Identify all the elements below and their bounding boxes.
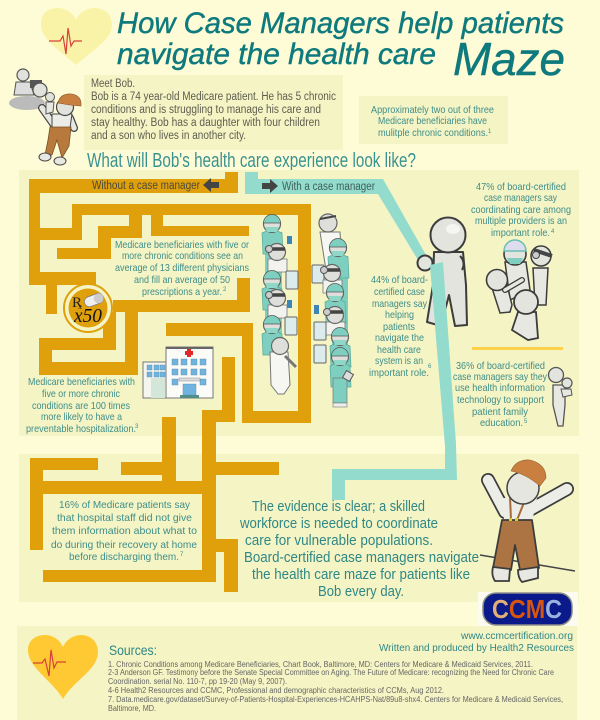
text: physicians and prescriptions [115,239,249,298]
panel: two out of three: mulitple chronic conditions. [378,127,488,139]
text: source list: Coordination. serial No. 110-7, pp 19-20 (May 9, 2007). [108,677,287,686]
panel: meet Bob: and a son who lives in another city. [91,130,246,142]
text: source list: 1. Chronic Conditions among Medicare Beneficiaries, Chart Book, Baltimore, MD: Centers for Medicare & Medicaid Services, 2011. [108,660,533,669]
text: health information technology: 36% of board-certified [456,360,545,372]
text: the evidence is clear: the health care maze for patients like [252,567,470,583]
illustration: doctors column right [312,214,353,407]
panel: two out of three: Approximately two out of three [371,104,494,116]
text: navigate the health care system: managers say [372,298,428,310]
text: the evidence is clear: The evidence is clear; a skilled [252,499,425,515]
divider [472,347,563,350]
text: coordinating care: case managers say [484,192,558,204]
text: source list [108,660,563,713]
text: navigate the health care system: system is an [375,355,423,367]
illustration: doctors column left [262,214,298,394]
text: navigate the health care system: navigate the [375,332,424,344]
panel: maze lower [19,454,579,602]
panel: meet Bob: Meet Bob. [91,78,135,90]
label: with a case manager: With a case manager [282,181,375,193]
text: navigate the health care system: certified case [374,286,425,298]
icon: Rx x50 prescription: x50 [73,305,102,327]
icon: Rx x50 prescription [64,284,112,332]
text: hospital discharge information: before discharging them. [69,551,179,563]
text: source list: 4-6 Health2 Resources and CCMC, Professional and demographic characteristics of CCMs, Aug 2012. [108,686,444,695]
text: website and credit: www.ccmcertification.org [460,630,573,642]
text: health information technology: patient family [472,406,529,418]
text: website and credit [379,630,574,654]
icon: pale heart with heartbeat [41,8,112,65]
text: preventable hospitalization: Medicare beneficiaries with [28,376,135,388]
panel: maze main [19,170,579,436]
text: navigate the health care system [369,274,432,379]
text: preventable hospitalization: conditions are 100 times [32,400,130,412]
text: coordinating care: coordinating care among [471,204,571,216]
text: physicians and prescriptions: average of 13 different physicians [115,262,249,274]
text: physicians and prescriptions: and fill an average of 50 [134,274,230,286]
panel: sources [17,626,577,720]
text: preventable hospitalization: preventable hospitalization. [26,423,136,435]
text: navigate the health care system: helping [385,309,414,321]
text: physicians and prescriptions: Medicare beneficiaries with five or [115,239,249,251]
text: physicians and prescriptions: 2 [223,287,227,293]
text: health information technology: 5 [524,419,528,425]
text: website and credit: Written and produced by Health2 Resources [379,642,574,654]
text: the evidence is clear [239,499,479,600]
text: health information technology [453,360,548,429]
maze without a case manager [29,172,311,592]
text: source list: Baltimore, MD. [108,704,156,713]
title: navigate the health care [117,38,436,71]
text: the evidence is clear: workforce is needed to coordinate [239,516,438,532]
panel: meet Bob: conditions and is struggling to manage his care and [91,104,321,116]
text: navigate the health care system: important role. [369,367,429,379]
panel: meet Bob: Bob is a 74 year-old Medicare patient. He has 5 chronic [91,91,336,103]
text: hospital discharge information: 7 [180,552,184,558]
label: with a case manager [262,179,375,193]
text: preventable hospitalization: 3 [135,424,139,430]
illustration: Bob and family [9,69,81,165]
text: navigate the health care system: 6 [428,364,432,370]
maze path with a case manager [245,172,457,500]
logo: CCMC [478,592,578,626]
text: the evidence is clear: Bob every day. [318,584,404,600]
illustration: care team group [486,240,552,340]
text: navigate the health care system: health care [377,344,421,356]
panel: two out of three: 1 [488,129,492,135]
panel: meet Bob [84,75,343,150]
icon: gold heart with heartbeat [28,635,98,699]
heading: what will Bob's experience look like: What will Bob's health care experience look like? [87,150,416,172]
text: health information technology: case managers say they [453,371,548,383]
text: the evidence is clear: Board-certified case managers navigate [244,550,479,566]
panel: two out of three: Medicare beneficiaries have [378,115,487,127]
text: physicians and prescriptions: prescriptions a year. [142,286,222,298]
text: preventable hospitalization: five or more chronic [42,388,120,400]
text: source list: 7. Data.medicare.gov/dataset/Survey-of-Patients-Hospital-Experiences-HCAHPS-Nat/89u8-shx4. Centers for Medicare & Medicaid Services, [108,695,563,704]
icon: hospital [143,347,213,398]
text: preventable hospitalization: more likely to have a [41,411,122,423]
label: without a case manager: Without a case manager [92,180,200,192]
title: Maze [453,33,565,85]
text: physicians and prescriptions: more chronic conditions see an [122,250,243,262]
illustration: big case manager figure [418,218,467,445]
text: coordinating care: multiple providers is an [475,215,567,227]
text: health information technology: technology to support [457,394,544,406]
text: preventable hospitalization [26,376,139,435]
text: hospital discharge information: 16% of Medicare patients say [59,499,191,511]
text: hospital discharge information: that hospital staff did not give [57,512,192,524]
logo: CCMC: CCMC [492,594,562,624]
text: health information technology: use health information [455,382,545,394]
icon: Rx x50 prescription: x [78,302,82,311]
text: coordinating care: 4 [551,229,555,235]
text: navigate the health care system: 44% of board- [371,274,428,286]
heading: sources: Sources: [109,642,157,658]
text: hospital discharge information: do during their recovery at home [51,539,197,551]
text: navigate the health care system: patients [383,321,415,333]
title [117,7,565,85]
icon: Rx x50 prescription: R [72,295,82,311]
text: source list: 2-3 Anderson GF. Testimony before the Senate Special Committee on Aging. The Future of Medicare: recognizing the Need for Chronic Care [108,668,554,677]
text: the evidence is clear: care for vulnerable populations. [245,533,433,549]
text: coordinating care: 47% of board-certified [476,181,566,193]
title: How Case Managers help patients [117,7,564,40]
panel: meet Bob: stay healthy. Bob has a daughter with four children [91,117,320,129]
text: coordinating care: important role. [491,227,550,239]
illustration: parent holding child [548,368,572,426]
text: health information technology: education. [480,417,523,429]
illustration: Bob cheering [480,460,575,582]
text: coordinating care [471,181,571,239]
text: hospital discharge information [51,499,197,563]
text: hospital discharge information: them information about what to [52,525,197,537]
panel: two out of three [359,96,508,144]
